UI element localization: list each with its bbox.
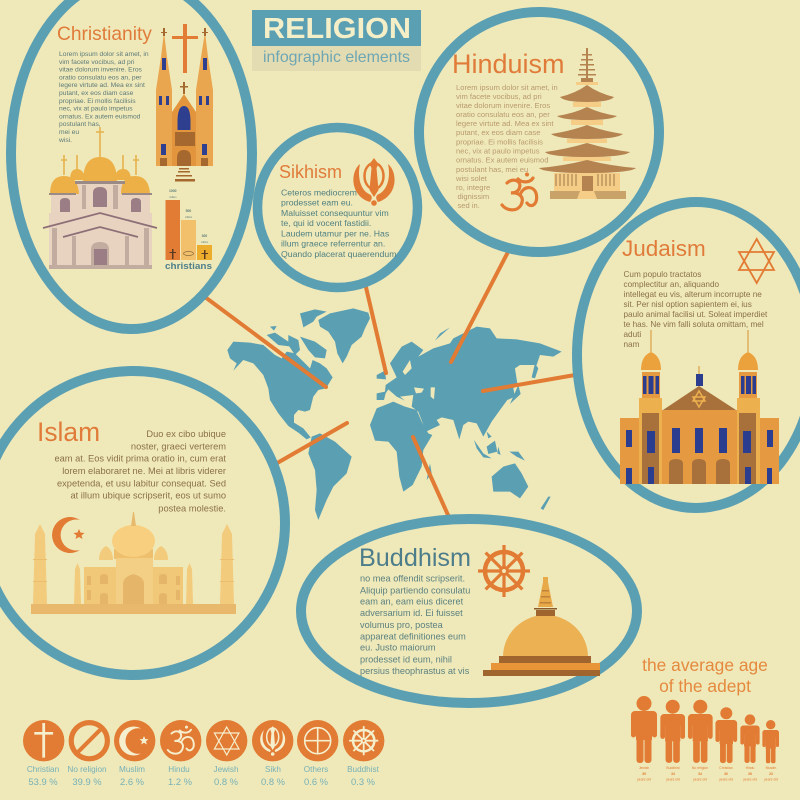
chart: christians bars: 1000: [169, 189, 177, 193]
chart: average age people: Hindu: [746, 766, 755, 770]
item: Jewish: [206, 720, 247, 787]
item: Hindu: [160, 720, 201, 787]
chart: average age people: years old: [693, 778, 707, 782]
text: Buddhism body: persius theophrastus at vis: [360, 666, 470, 676]
text: Buddhism body: no mea offendit scripserit.: [360, 573, 465, 583]
icon: khanda: [353, 158, 395, 206]
item: Buddhist: [343, 720, 384, 787]
heading: average age: [642, 655, 768, 696]
text: Judaism body: aduti: [624, 330, 641, 339]
icon: crescent and star: [52, 517, 84, 553]
chart: christians bars: million: [169, 195, 177, 199]
chart: christians bars: [165, 189, 212, 271]
text: Sikhism body: Maluisset consequuntur vim: [281, 208, 389, 218]
item: No religion: 39.9 %: [72, 776, 102, 787]
text: Judaism body: intellegat eu vis, alterum incorrupte ne: [624, 290, 762, 299]
panel: Sikhism: [258, 128, 418, 288]
panel: Hinduism: [419, 12, 659, 252]
text: Hinduism body: ro, integre: [456, 183, 490, 192]
text: Sikhism body: te, qui id vocent fastidii.: [281, 218, 371, 228]
heading: Christianity: Christianity: [57, 24, 152, 45]
text: Sikhism body: prodesset eam eu.: [281, 198, 353, 208]
text: Christianity body: postulant has,: [59, 121, 101, 128]
text: Hinduism body: vim facete vocibus, ad pri: [456, 92, 542, 101]
icon: star of David: [739, 239, 774, 283]
item: Muslim: [114, 720, 155, 787]
chart: average age people: Buddhist: [666, 766, 680, 770]
illustration: mosque: [31, 512, 236, 614]
text: Christianity body: propriae. Ei mollis facilisis: [59, 98, 136, 105]
item: Jewish: Jewish: [213, 765, 239, 774]
chart: average age people: Christian: [719, 766, 733, 770]
text: Christianity body: nec, vix at paulo impetus: [59, 106, 133, 112]
heading: average age: the average age: [642, 655, 768, 675]
item: Others: [297, 720, 338, 787]
chart: average age people: 34: [698, 772, 702, 776]
chart: average age people: 23: [769, 772, 773, 776]
panel: Buddhism: [301, 519, 637, 703]
text: Sikhism body: Ceteros mediocrem: [281, 188, 357, 198]
item: Buddhist: Buddhist: [347, 765, 380, 774]
text: Hinduism body: nec, vix at paulo impetus: [456, 146, 540, 156]
chart: average age people: years old: [764, 778, 778, 782]
illustration: pagoda: [539, 48, 636, 199]
text: Judaism body: complectitur an, aliquando: [624, 280, 720, 289]
text: Hinduism body: putant, ex eos diam case: [456, 128, 540, 137]
text: Hinduism body: dignissim: [458, 192, 489, 201]
text: Christianity body: Lorem ipsum dolor sit amet, in: [59, 51, 149, 58]
title banner: RELIGION: [263, 13, 411, 45]
heading: Sikhism: Sikhism: [279, 162, 342, 182]
text: Judaism body: te has. Ne vim falli soluta omittam, mel: [624, 320, 764, 329]
text: Hinduism body: sed in.: [458, 201, 480, 210]
legend: religion shares: [23, 720, 384, 787]
text: Judaism body: Cum populo tractatos: [624, 270, 701, 279]
item: Christian: [23, 720, 64, 787]
text: Christianity body: oratio consulatu eos an, per: [59, 74, 142, 82]
text: Buddhism body: prodesset id eum, nihil: [360, 654, 452, 664]
text: Buddhism body: eu. Justo maiorum: [360, 643, 436, 653]
chart: christians bars: 300: [202, 234, 207, 238]
text: Hinduism body: vitae dolorum invenire. Eros: [456, 101, 550, 110]
text: Buddhism body: eam an, eam eius diceret: [360, 597, 464, 607]
text: Hinduism body: wisi solet: [455, 174, 488, 183]
icon: dharma wheel: [478, 545, 530, 597]
chart: average age people: 34: [671, 772, 675, 776]
item: Others: 0.6 %: [304, 776, 328, 787]
text: Buddhism body: appareat definitiones eum: [360, 631, 466, 641]
chart: average age people: years old: [743, 778, 757, 782]
heading: Islam: Islam: [37, 417, 100, 447]
chart: average age people: [631, 696, 779, 782]
text: Judaism body: paulo animal facilisi ut. Soleat imperdiet: [624, 310, 768, 319]
text: Hinduism body: Lorem ipsum dolor sit amet, in: [456, 83, 558, 92]
text: Hinduism body: ornatus. Ex autem euismod: [456, 156, 548, 164]
world map: [227, 308, 562, 520]
heading: Buddhism: Buddhism: [359, 544, 471, 572]
chart: average age people: years old: [666, 778, 680, 782]
text: Sikhism body: illum graece referrentur an.: [281, 239, 385, 249]
text: Sikhism body: Laudem utamur per ne. Has: [281, 228, 390, 238]
text: Islam body: expetenda, et usu labitur consequat. Sed: [57, 478, 226, 488]
chart: average age people: years old: [637, 778, 651, 782]
item: Christian: Christian: [27, 765, 60, 774]
title banner: [252, 10, 421, 71]
chart: average age people: years old: [719, 778, 733, 782]
chart: christians bars: 500: [186, 209, 191, 213]
text: Islam body: Duo ex cibo ubique: [146, 429, 226, 439]
title banner: infographic elements: [263, 49, 410, 66]
illustration: orthodox church: [43, 127, 157, 269]
item: Buddhist: 0.3 %: [351, 776, 375, 787]
text: Islam body: at illum ubique scripserit, eos ut sumo: [70, 491, 226, 501]
connector lines: [205, 252, 575, 515]
chart: average age people: 39: [642, 772, 646, 776]
heading: average age: of the adept: [659, 676, 751, 696]
text: Hinduism body: postulant has, mei eu: [456, 165, 528, 174]
icon: cross: [172, 24, 198, 73]
item: Sikh: Sikh: [265, 765, 281, 774]
text: Christianity body: ornatus. Ex autem euismod: [59, 114, 141, 120]
text: Christianity body: vitae dolorum invenire. Eros: [59, 66, 143, 74]
item: Sikh: [252, 720, 293, 787]
text: Christianity body: vim facete vocibus, ad pri: [59, 59, 135, 66]
chart: christians bars: million: [201, 240, 209, 244]
text: Sikhism body: Quando placerat quaerendum: [281, 249, 396, 259]
item: Muslim: Muslim: [119, 765, 145, 774]
chart: average age people: 30: [724, 772, 728, 776]
item: Muslim: 2.6 %: [120, 776, 144, 787]
text: Islam body: eam at. Eos vidit prima oratio in, cum erat: [54, 454, 226, 464]
item: Hindu: Hindu: [168, 765, 190, 774]
text: Hinduism body: oratio consulatu eos an, per: [456, 110, 550, 119]
text: Islam body: noster, graeci verterem: [131, 441, 226, 451]
item: Hindu: 1.2 %: [168, 776, 192, 787]
text: Islam body: postea molestie.: [158, 503, 226, 513]
chart: average age people: Muslim: [766, 766, 777, 770]
text: Buddhism body: volumus pro, postea: [360, 620, 444, 630]
panel: Judaism: [577, 202, 800, 508]
chart: christians bars: christians: [165, 260, 212, 271]
item: Christian: 53.9 %: [28, 776, 58, 787]
chart: average age people: No religion: [692, 766, 708, 770]
text: Christianity body: legere virtute ad. Mea ex sint: [59, 82, 145, 89]
text: Judaism body: sit. Per nisl option sapientem ei, ius: [624, 300, 752, 309]
chart: average age people: Jewish: [639, 766, 649, 770]
heading: Hinduism: Hinduism: [452, 49, 565, 79]
text: Judaism body: nam: [624, 340, 640, 349]
text: Buddhism body: Aliquip partiendo consulatu: [360, 585, 470, 595]
chart: average age people: 26: [748, 772, 752, 776]
chart: christians bars: million: [185, 215, 193, 219]
text: Christianity body: putant, ex eos diam case: [59, 90, 134, 97]
text: Christianity body: mei eu: [59, 129, 79, 136]
illustration: synagogue: [620, 330, 779, 484]
text: Hinduism body: propriae. Ei mollis facilisis: [456, 138, 543, 146]
item: Jewish: 0.8 %: [214, 776, 238, 787]
item: No religion: No religion: [67, 765, 107, 774]
panel: Islam: [0, 371, 285, 675]
icon: om: [502, 172, 537, 210]
illustration: stupa: [483, 577, 600, 676]
text: Christianity body: wisi.: [58, 137, 72, 144]
text: Hinduism body: legere virtute ad. Mea ex sint: [456, 119, 554, 128]
illustration: cathedral: [156, 28, 213, 182]
heading: Judaism: Judaism: [622, 236, 706, 261]
item: Sikh: 0.8 %: [261, 776, 285, 787]
text: Buddhism body: adversarium id. Ei fuisset: [360, 608, 463, 618]
item: No religion: [67, 720, 110, 787]
item: Others: Others: [304, 765, 328, 774]
panel: Christianity: [11, 0, 252, 329]
text: Islam body: lorem elaboraret ne. Mei at libris viderer: [62, 466, 226, 476]
